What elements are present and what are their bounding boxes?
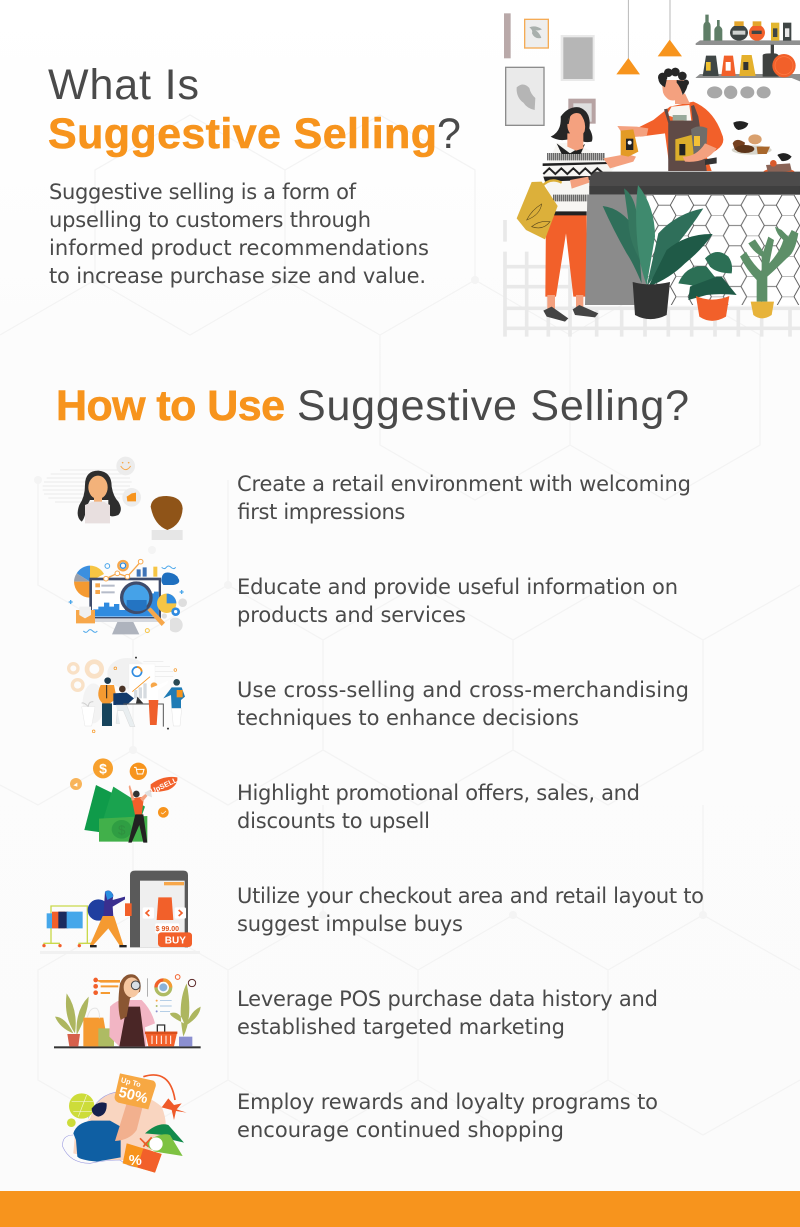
counter [585,172,800,305]
step 5 [40,871,704,954]
step text [237,575,678,627]
step text: Leverage POS purchase data history and [237,987,658,1011]
wall frames [504,13,596,125]
step 7 [63,1073,658,1173]
step text: encourage continued shopping [237,1118,564,1142]
step text: techniques to enhance decisions [237,706,579,730]
icon: rewards and discount: Up To [120,1075,142,1089]
icon: money and upsell promotion: $ [99,760,107,776]
icon: rewards and discount: % [129,1153,142,1169]
floor grid [503,220,800,337]
step 2 [69,559,678,634]
large potted plant [603,185,713,319]
step text [237,884,704,936]
section heading [56,382,689,430]
icon: analyst with shopping bags [54,974,201,1048]
small potted plant [678,252,737,321]
step text: products and services [237,603,466,627]
step text [237,1090,658,1142]
title: ? [437,110,461,158]
coffee bag handoff [621,129,638,157]
title [48,61,461,158]
title: What Is [48,61,199,109]
step text: first impressions [237,500,405,524]
section heading: How to Use [56,382,285,430]
barista [617,68,723,171]
intro text block: upselling to customers through [49,208,371,232]
step text [237,781,640,833]
step text: established targeted marketing [237,1015,565,1039]
step text: Employ rewards and loyalty programs to [237,1090,658,1114]
step 4 [70,758,640,843]
step text: suggest impulse buys [237,912,463,936]
icon: shopping by phone: $ 99.00 [156,926,179,933]
footer bar [0,1191,800,1227]
icon: shopping by phone [40,871,200,954]
cactus [740,227,798,318]
pastries [732,121,795,177]
icon: rewards and discount: 50% [117,1085,149,1107]
icon: rewards and discount [63,1073,187,1173]
icon: money and upsell promotion: $ [118,822,126,837]
pendant lamps [616,0,682,74]
icon: product data screen [69,559,187,634]
intro text block: informed product recommendations [49,236,429,260]
intro text block: to increase purchase size and value. [49,264,426,288]
step 3 [69,657,689,733]
step text [237,987,658,1039]
step text: Create a retail environment with welcoming [237,472,691,496]
step text [237,472,691,524]
step text: Utilize your checkout area and retail layout to [237,884,704,908]
icon: money and upsell promotion [70,758,179,843]
illustration: coffee shop counter [503,0,800,337]
icon: customer greeting [43,457,183,540]
woman customer [543,107,636,322]
shelves [696,15,800,99]
step text: Use cross-selling and cross-merchandising [237,678,689,702]
step text: Highlight promotional offers, sales, and [237,781,640,805]
step 1 [43,457,691,540]
title: Suggestive Selling [48,110,437,158]
icon: money and upsell promotion: UpSELL [149,775,179,796]
step text: Educate and provide useful information on [237,575,678,599]
step text [237,678,689,730]
icon: team meeting [69,657,185,733]
step 6 [54,974,658,1048]
step text: discounts to upsell [237,809,430,833]
intro text block [49,180,429,288]
section heading: Suggestive Selling? [297,382,689,430]
intro text block: Suggestive selling is a form of [49,180,357,204]
shopping bag [517,180,562,239]
icon: shopping by phone: BUY [165,935,186,946]
